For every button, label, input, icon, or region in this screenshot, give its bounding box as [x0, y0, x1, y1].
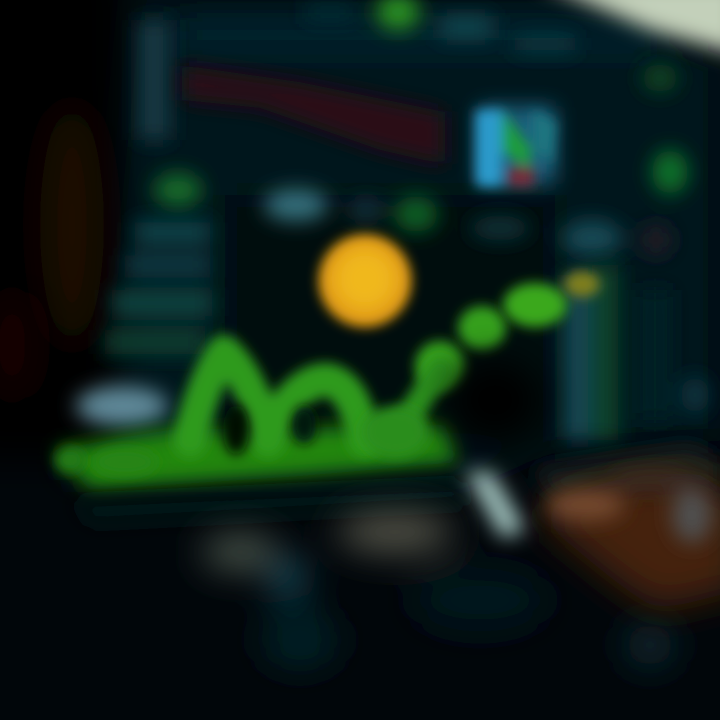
yellow sun circle — [319, 235, 411, 327]
top right window light — [535, 0, 720, 55]
monitor bottom edge — [70, 482, 470, 525]
chart rising beads — [415, 341, 465, 391]
person silhouette at left — [0, 0, 120, 460]
hand at right — [545, 474, 720, 610]
chart base — [55, 425, 458, 490]
monitor screen — [60, 0, 720, 480]
left pale label — [76, 386, 168, 426]
right side bars — [564, 265, 709, 440]
logo tile — [478, 106, 556, 184]
top header blocks — [305, 0, 678, 92]
dark red headline band — [182, 65, 445, 165]
left side data rows — [105, 222, 212, 354]
green line chart — [55, 271, 600, 490]
light paper strip — [465, 445, 720, 538]
left vertical strip — [138, 20, 170, 140]
chart arches — [190, 352, 365, 440]
blurred keyboard highlights — [202, 512, 675, 668]
green and blue interface labels — [154, 150, 688, 256]
